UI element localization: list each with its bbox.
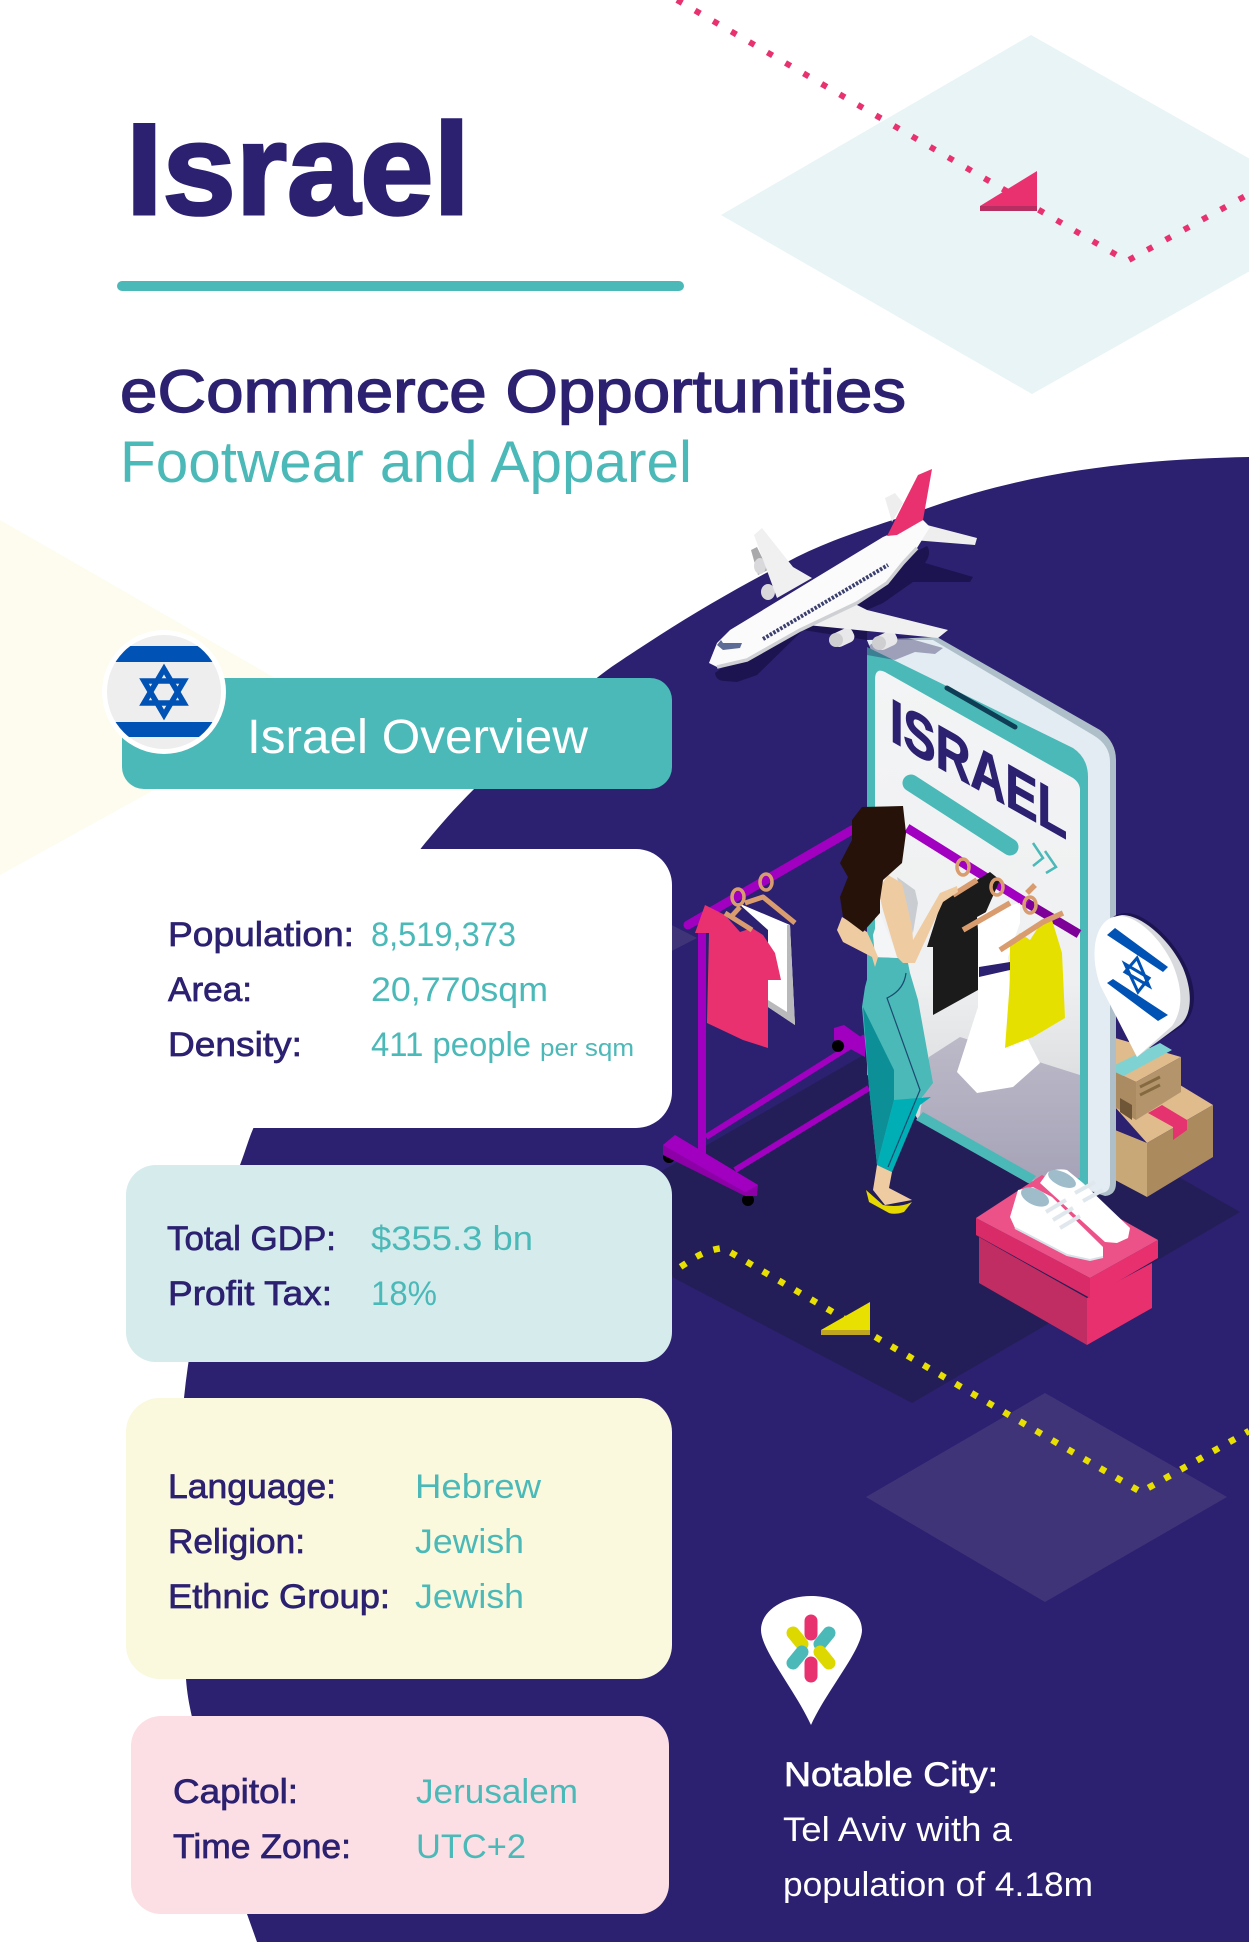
capital row [173,1773,578,1811]
illustration: plane shadow [715,546,973,682]
density row: per sqm [540,1035,634,1062]
phone teal bar [911,783,1010,847]
notable city text: Notable City: [784,1756,998,1794]
illustration: map pin with flag [1094,913,1194,1057]
language row [168,1468,541,1506]
density row: Density: [168,1026,302,1064]
area row [168,971,548,1009]
ethnic group row [168,1578,524,1616]
GDP row: Total GDP: [167,1220,336,1258]
population row [168,916,516,954]
area row: 20,770sqm [371,971,548,1009]
density row: 411 people [371,1026,531,1064]
subtitle second line: Footwear and Apparel [120,430,692,495]
religion row: Jewish [415,1523,524,1561]
illustration: woman [837,806,958,1214]
icon: city pin [761,1596,862,1725]
capital row: Jerusalem [416,1773,578,1811]
illustration: plane [709,469,977,667]
phone speaker slot [947,688,1015,727]
religion row [168,1523,524,1561]
panel: capital [131,1716,669,1914]
yellow dotted path [665,1248,1249,1492]
leggings [862,957,933,1170]
time zone row: Time Zone: [173,1828,351,1866]
tail fin [887,469,932,536]
illustration: shoe box [976,1175,1158,1345]
top [897,877,918,933]
population row: 8,519,373 [371,916,516,954]
illustration: boxes [1115,1038,1213,1197]
wings and tailplane [754,528,812,598]
title: Israel [126,96,470,242]
title underline [117,281,684,291]
background cream triangle left [0,520,315,875]
panel: culture [126,1398,672,1679]
density row [168,1026,634,1064]
time zone row: UTC+2 [416,1828,526,1866]
population row: Population: [168,916,354,954]
illustration: sneakers [1010,1166,1130,1260]
phone chevrons [1033,843,1056,873]
windows [763,565,888,639]
illustration: right garments [927,859,1065,1093]
ethnic group row: Ethnic Group: [168,1578,390,1616]
hair [840,806,906,932]
phone heading: ISRAEL [890,685,1067,853]
language row: Hebrew [415,1468,541,1506]
illustration: phone [867,635,1116,1196]
overview heading: Israel Overview [247,711,588,764]
GDP row [167,1220,533,1258]
capital row: Capitol: [173,1773,298,1811]
notable city text [783,1756,1093,1904]
panel: overview header [122,678,672,789]
ethnic group row: Jewish [415,1578,524,1616]
illustration: clothes rack [663,828,1079,1206]
cockpit [717,640,742,650]
icon: Israel flag circle [100,630,230,754]
panel: population [100,849,672,1128]
illustration: left garments [695,874,795,1048]
pink dotted path [677,0,1249,261]
small lighter diamond behind panel [660,919,697,957]
engines [751,547,899,652]
time zone row [173,1828,526,1866]
profit tax row [168,1275,437,1313]
feet [873,1165,912,1205]
area row: Area: [168,971,252,1009]
subtitle: eCommerce Opportunities [120,358,906,425]
rear fin [885,493,903,522]
notable city text: population of 4.18m [783,1866,1093,1904]
profit tax row: Profit Tax: [168,1275,332,1313]
religion row: Religion: [168,1523,305,1561]
panel: economy [126,1165,672,1362]
background diamond top right [721,35,1249,394]
arms [878,875,958,963]
lower translucent diamond [866,1393,1227,1602]
yellow arrow [821,1302,870,1335]
profit tax row: 18% [371,1275,437,1313]
GDP row: $355.3 bn [371,1220,533,1258]
fuselage [709,520,930,667]
pink arrow [980,171,1037,211]
purple background shape [181,457,1249,1942]
isometric dark floor [655,1000,1240,1403]
language row: Language: [168,1468,336,1506]
notable city text: Tel Aviv with a [783,1811,1012,1849]
